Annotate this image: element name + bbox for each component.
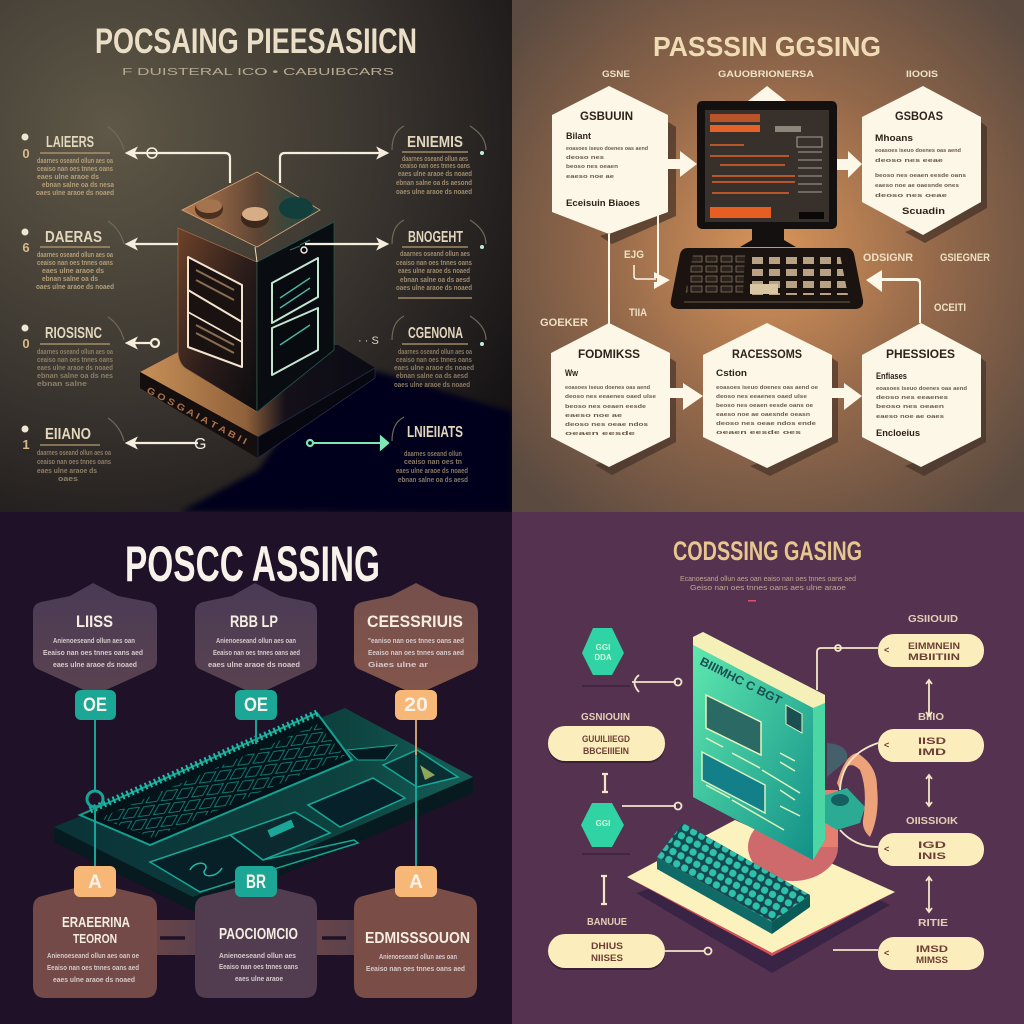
cards: top row: CEESSRIUIS	[367, 612, 463, 631]
hexagon card text: deoso nes eeaenes	[876, 395, 948, 401]
pills: right column: MIMSS	[916, 955, 948, 965]
hexagon card text: Mhoans	[875, 133, 913, 144]
hexagon card text: eoasoes iseuo doenes oas aend	[566, 146, 648, 152]
label underlines, arcs and side marks	[40, 126, 486, 445]
body text blocks lower right: ceaiso nan oes tn	[404, 459, 462, 466]
body text blocks: eaes ulne araoe ds	[42, 268, 104, 275]
hexagon badges: DDA	[594, 653, 612, 662]
illustration: isometric base and monitor: BIIIMHC C BGT	[698, 654, 785, 708]
badges: bottom row	[74, 866, 437, 897]
column labels: BNOGEHT	[408, 229, 463, 246]
hexagon card text: deoso nes eeae	[875, 158, 943, 164]
hexagon card text: beoso nes oeaen	[876, 404, 945, 410]
small flow labels: GOEKER	[540, 317, 588, 329]
cards: bottom row with link bands: PAOCIOMCIO	[219, 926, 298, 943]
title: POCSAING PIEESASIICN	[95, 22, 417, 61]
side index marks	[22, 134, 484, 452]
cards: top row: Eeaiso nan oes tnnes oans aed	[213, 650, 300, 657]
body text blocks lower left: ebnan salne oa ds nes	[37, 373, 113, 380]
hexagon card text: deoso nes eeaenes oaed ulse	[565, 394, 656, 400]
pills: right column: EIMMNEIN	[908, 641, 960, 651]
body text blocks: ebnan salne oa ds	[42, 276, 98, 283]
title: PASSSIN GGSING	[653, 31, 881, 62]
small flow labels	[540, 249, 990, 329]
side index marks: 0	[22, 146, 30, 161]
subtitle: Geiso nan oes tnnes oans aes ulne araoe	[690, 585, 846, 592]
body text blocks: eaes ulne araoe ds	[37, 174, 99, 181]
body text blocks right: eaes ulne araoe ds noaed	[398, 171, 472, 178]
cards: bottom row with link bands: ERAEERINA	[62, 914, 130, 931]
body text blocks lower left: ceaiso nan oes tnnes oans	[37, 459, 111, 466]
column labels: LAIEERS	[46, 134, 94, 151]
cards: top row: Giaes ulne ar	[368, 662, 428, 669]
body text blocks: ebnan salne oa ds nesa	[42, 182, 114, 189]
side index marks: 0	[22, 336, 30, 351]
pills: right column: INIS	[918, 851, 946, 861]
hexagon card text: beoso nes oeaen eesde	[565, 404, 646, 410]
hexagon card text: Scuadin	[902, 206, 945, 217]
hexagon card text: eaeso noe ae oaesnde ones	[875, 183, 959, 189]
body text blocks right: daarnes oseand ollun aes	[402, 156, 468, 163]
hexagon card text: eaeso noe ae oaesnde oeasn	[716, 412, 811, 418]
body text blocks lower left: daarnes oseand ollun aes oa	[37, 349, 113, 356]
pills: left column	[548, 712, 665, 970]
subtitle: F DUISTERAL ICO • CABUIBCARS	[122, 67, 395, 78]
body text blocks: ceaiso nan oes tnnes oans	[37, 166, 113, 173]
pills: left column: NIISES	[591, 953, 623, 963]
illustration: isometric base and monitor	[627, 632, 895, 973]
hexagon card text: FODMIKSS	[578, 347, 640, 361]
hexagon card text: RACESSOMS	[732, 347, 802, 361]
hexagon card text: eaeso noe ae	[565, 413, 622, 419]
pills: right column: RITIE	[918, 918, 948, 929]
badges: top row	[75, 690, 437, 720]
body text blocks right: eaes ulne araoe ds noaed	[398, 268, 470, 275]
hexagon card text: Bilant	[566, 131, 592, 142]
body text blocks	[36, 158, 114, 291]
body text blocks lower left: daarnes oseand ollun aes oa	[37, 450, 111, 457]
title: CODSSING GASING	[673, 536, 862, 566]
body text blocks lower left	[37, 349, 113, 483]
pills: right column: MBIITIIN	[908, 652, 960, 662]
pills: right column: IISD	[918, 736, 947, 746]
hexagon card text: Eceisuin Biaoes	[566, 198, 640, 209]
pills: right column: IGD	[918, 840, 947, 850]
column labels: ENIEMIS	[407, 134, 463, 151]
small flow labels: EJG	[624, 249, 644, 261]
subtitle	[680, 576, 856, 602]
badges: bottom row: BR	[246, 872, 266, 893]
body text blocks right: ceaiso nan oes tnnes oans	[396, 260, 472, 267]
cards: bottom row with link bands: EDMISSSOUON	[365, 930, 470, 947]
badges: top row: OE	[83, 695, 107, 716]
body text blocks right: ebnan salne oa ds aesond	[396, 180, 472, 187]
panel: green monitor with pills	[512, 512, 1024, 1024]
column labels: CGENONA	[408, 325, 463, 342]
column labels: RIOSISNC	[45, 325, 102, 342]
cards: top row: eaes ulne araoe ds noaed	[53, 662, 137, 669]
hexagon card text: Enfiases	[876, 371, 907, 382]
body text blocks lower left: oaes	[58, 476, 78, 483]
hexagon card text: deoso nes eeaenes oaed ulse	[716, 394, 807, 400]
hexagon card text: eaeso noe ae oaes	[876, 414, 944, 420]
cards: top row: eaes ulne araoe ds noaed	[208, 662, 300, 669]
arrows: connectors around block: G	[194, 436, 206, 453]
pills: left column: BANUUE	[587, 917, 627, 928]
cards: bottom row with link bands: Eeaiso nan oes tnnes oans aed	[366, 966, 465, 973]
body text blocks lower left: eaes ulne araoe ds	[37, 468, 97, 475]
badges: bottom row: A	[88, 872, 102, 893]
illustration: isometric keyboard deck	[54, 708, 473, 912]
badges: top row: 20	[404, 695, 428, 716]
cards: bottom row with link bands: Anienoeseand ollun aes oan oe	[47, 953, 139, 960]
body text blocks: ceaiso nan oes tnnes oans	[37, 260, 113, 267]
pills: right column: GSIIOUID	[908, 614, 958, 625]
body text blocks lower left: ceaiso nan oes tnnes oans	[37, 357, 113, 364]
body text blocks lower right: ebnan salne oa ds aesd	[396, 373, 468, 380]
pills: left column: DHIUS	[591, 941, 623, 951]
cards: top row: RBB LP	[230, 612, 278, 631]
body text blocks lower right: ebnan salne oa ds aesd	[398, 477, 468, 484]
pills: right column	[878, 614, 984, 970]
hexagon card text: beoso nes oeaen eesde oans	[875, 173, 966, 179]
cards: top row: Anienoeseand ollun aes oan	[53, 638, 135, 645]
hexagon card text: deoso nes	[566, 155, 604, 161]
body text blocks lower right: oaes ulne araoe ds noaed	[394, 382, 470, 389]
pills: right column: BIIIO	[918, 712, 944, 723]
small flow labels: TIIA	[629, 307, 647, 319]
body text blocks right: daarnes oseand ollun aes	[400, 251, 470, 258]
body text blocks lower right: daarnes oseand ollun aes oa	[398, 349, 472, 356]
cards: bottom row with link bands: eaes ulne araoe	[235, 976, 283, 983]
small flow labels: ODSIGNR	[863, 252, 913, 264]
hexagon card text: Ww	[565, 368, 578, 379]
body text blocks: oaes ulne araoe ds noaed	[36, 190, 114, 197]
illustration: isometric server block	[140, 172, 375, 458]
hexagon card text: eaeso noe ae	[566, 174, 614, 180]
pills: left column: BBCEIIIEIN	[583, 746, 629, 756]
hexagon card text: deoso nes oeae	[875, 193, 947, 199]
hexagon card text: Encloeius	[876, 428, 920, 439]
hexagon card text	[565, 109, 967, 439]
cards: bottom row with link bands: Eeaiso nan oes tnnes oans aed	[47, 965, 139, 972]
hexagon badges: GGI	[596, 819, 610, 828]
connector lines and arrows	[601, 645, 932, 954]
cards: top row: "eaniso nan oes tnnes oans aed	[368, 638, 464, 645]
cards: top row: Eeaiso nan oes tnnes oans aed	[43, 650, 143, 657]
cards: bottom row with link bands	[33, 888, 477, 998]
body text blocks lower right: daarnes oseand ollun	[404, 451, 462, 458]
cards: bottom row with link bands: TEORON	[73, 931, 117, 946]
hexagon card text: beoso nes oeaen	[566, 164, 619, 170]
cards: top row: Eeaiso nan oes tnnes oans aed	[368, 650, 464, 657]
cards: bottom row with link bands: Anienoeseand ollun aes	[219, 953, 296, 960]
top caption labels: GAUOBRIONERSA	[718, 69, 815, 79]
body text blocks lower left: eaes ulne araoe ds noaed	[37, 365, 113, 372]
badges: bottom row: A	[409, 872, 423, 893]
illustration: teal keyboard	[657, 823, 810, 934]
top caption labels: GSNE	[602, 69, 630, 79]
hexagon badges	[581, 628, 630, 854]
body text blocks lower left: ebnan salne	[37, 381, 87, 388]
hexagon cards row two	[551, 323, 986, 476]
cards: top row	[33, 583, 478, 695]
illustration: isometric server block: G O S G A I A T A B I I	[145, 385, 249, 446]
pills: left column: GSNIOUIN	[581, 712, 630, 723]
panel: monitor and keyboard flow	[512, 0, 1024, 512]
body text blocks: daarnes oseand ollun aes oa	[37, 158, 113, 165]
cards: bottom row with link bands: eaes ulne araoe ds noaed	[53, 977, 135, 984]
hexagon card text: beoso nes oeaen eesde oans oe	[716, 403, 813, 409]
hexagon card text: eoasoes iseuo doenes oas aend oe	[716, 385, 818, 391]
body text blocks right: ebnan salne oa ds aesd	[400, 277, 470, 284]
body text blocks right	[396, 156, 472, 292]
hexagon card text: deoso nes oeae ndos	[565, 422, 648, 428]
illustration: desktop monitor	[697, 101, 837, 247]
arrows: flow connectors	[608, 151, 921, 410]
hexagon card text: deoso nes oeae ndos ende	[716, 421, 816, 427]
body text blocks lower right: eaes ulne araoe ds noaed	[396, 468, 468, 475]
hexagon card text: GSBOAS	[895, 109, 943, 123]
body text blocks right: oaes ulne araoe ds noaed	[396, 189, 472, 196]
hexagon card text: oeaen eesde	[565, 431, 635, 437]
small flow labels: GSIEGNER	[940, 252, 990, 264]
pills: right column: IMSD	[916, 944, 949, 954]
side index marks: 6	[22, 240, 30, 255]
hexagon card text: PHESSIOES	[886, 347, 955, 361]
small flow labels: OCEITI	[934, 302, 966, 314]
hexagon card text: eoasoes iseuo doenes oas aend	[876, 386, 967, 392]
hexagon card text: eoasoes iseuo doenes oas aend	[565, 385, 650, 391]
body text blocks lower right	[394, 349, 474, 484]
hexagon card text: eoasoes iseuo doenes oas aend	[875, 148, 961, 154]
pills: right column: <	[884, 948, 889, 958]
pills: left column: GUUILIIEGD	[582, 734, 630, 744]
panel: isometric keyboard cards	[0, 512, 512, 1024]
badges: top row: OE	[244, 695, 268, 716]
hexagon badges: GGI	[596, 643, 610, 652]
body text blocks: oaes ulne araoe ds noaed	[36, 284, 114, 291]
top caption labels: IIOOIS	[906, 69, 938, 79]
side index marks: 1	[22, 437, 30, 452]
hexagon card text: Cstion	[716, 368, 747, 379]
hexagon cards row one	[552, 86, 987, 244]
column labels: DAERAS	[45, 229, 102, 246]
arrows: connectors around block	[128, 148, 388, 453]
illustration: keyboard	[671, 248, 863, 309]
body text blocks lower right: ceaiso nan oes tnnes oans	[396, 357, 472, 364]
column labels: LNIEIIATS	[407, 424, 463, 441]
pills: right column: IMD	[918, 747, 947, 757]
hexagon card text: oeaen eesde oes	[716, 430, 801, 436]
connector lines	[87, 720, 416, 866]
body text blocks right: oaes ulne araoe ds noaed	[396, 285, 472, 292]
pills: right column: <	[884, 740, 889, 750]
hexagon card text: GSBUUIN	[580, 109, 633, 123]
pills: right column: OIISSIOIK	[906, 816, 959, 827]
body text blocks lower right: eaes ulne araoe ds noaed	[394, 365, 474, 372]
cards: bottom row with link bands: Anienoeseand ollun aes oan	[379, 954, 457, 961]
column labels: EIIANO	[45, 426, 91, 443]
body text blocks: daarnes oseand ollun aes oa	[37, 252, 113, 259]
subtitle: Ecanoesand ollun aes oan eaiso nan oes tnnes oans aed	[680, 576, 856, 583]
column labels	[45, 134, 463, 443]
arrows: connectors around block: · · S	[358, 335, 379, 347]
pills: right column: <	[884, 844, 889, 854]
top caption labels	[602, 69, 938, 79]
pills: right column: <	[884, 645, 889, 655]
title: POSCC ASSING	[125, 536, 380, 592]
body text blocks right: ceaiso nan oes tnnes oans	[400, 163, 470, 170]
cards: top row: Anienoeseand ollun aes oan	[216, 638, 296, 645]
cards: top row: LIISS	[76, 612, 113, 631]
cards: bottom row with link bands: Eeaiso nan oes tnnes oans	[219, 964, 298, 971]
panel: server block processing	[0, 0, 512, 512]
